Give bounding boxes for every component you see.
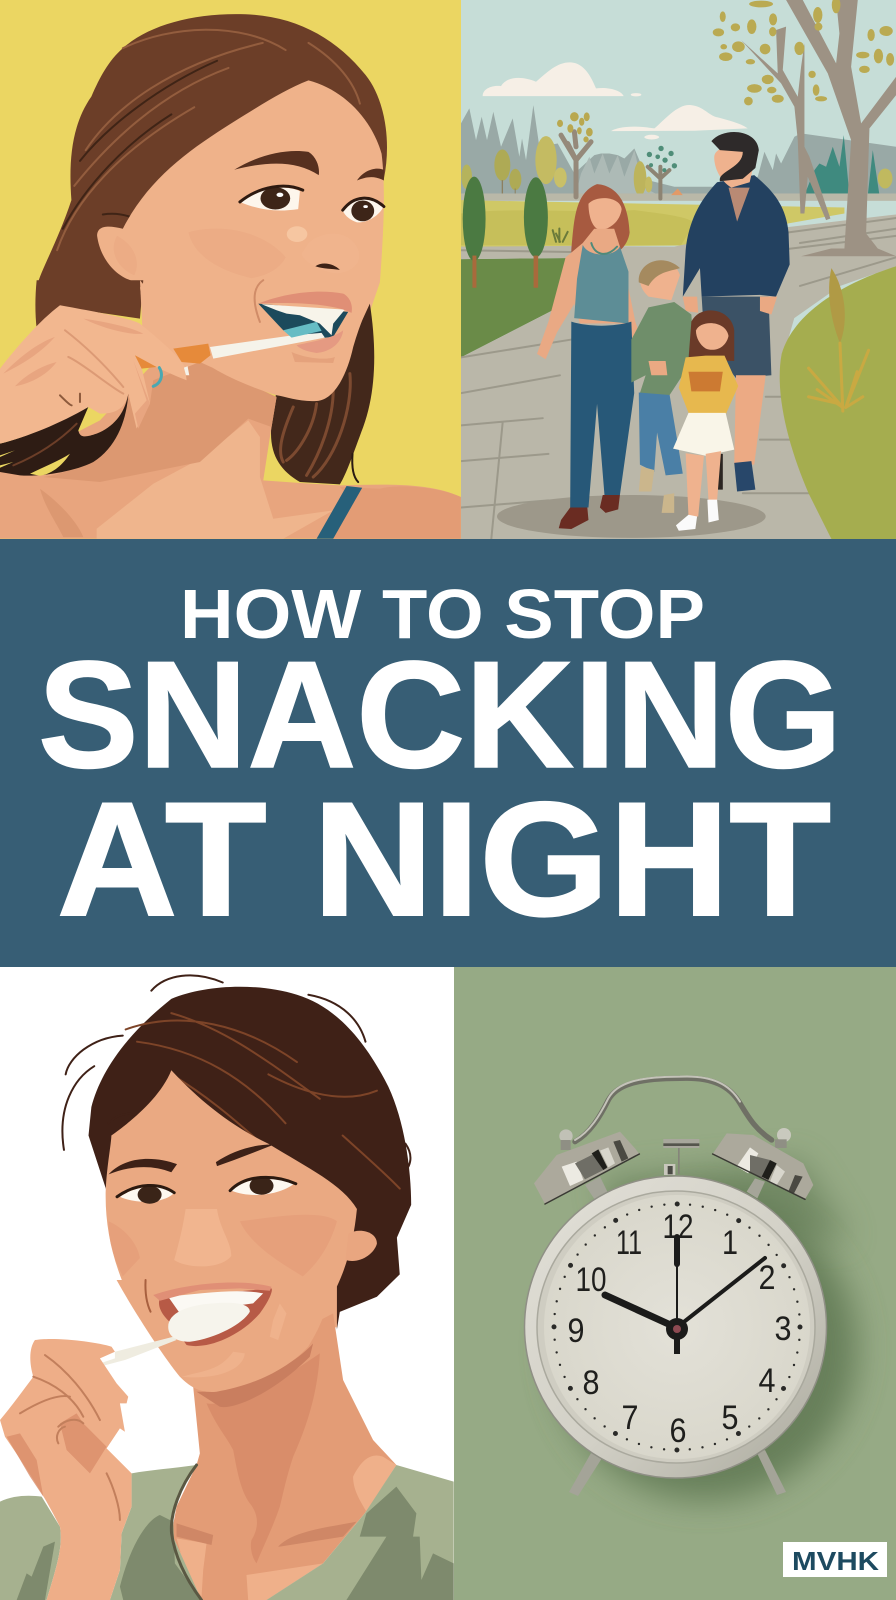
green lawn left	[461, 258, 583, 357]
chest highlight	[97, 420, 333, 539]
neck and chest	[0, 287, 461, 539]
clouds	[483, 62, 748, 139]
nose	[174, 1209, 231, 1266]
face	[106, 1070, 357, 1327]
teal trees	[804, 135, 879, 195]
neck	[172, 1313, 396, 1600]
logo badge: MVHK	[792, 1546, 879, 1576]
handle	[575, 1076, 772, 1142]
alarm pin	[663, 1139, 699, 1175]
clock numerals: 2	[758, 1259, 776, 1297]
panel: alarm clock on green	[454, 967, 896, 1600]
heading: how to stop: HOW TO STOP	[180, 575, 705, 653]
shirt folds	[17, 1487, 454, 1600]
lower portrait: hair, neck, hand, brush	[0, 280, 461, 539]
bell shadow	[600, 1160, 850, 1240]
eyebrows	[109, 1144, 274, 1174]
minute dots	[554, 1204, 800, 1450]
bells, handle and pin	[534, 1076, 813, 1204]
mouth	[153, 1283, 272, 1346]
lower right hair	[271, 304, 374, 484]
clock numerals: 9	[568, 1312, 584, 1350]
lower forest row	[574, 150, 668, 200]
clock numerals: 3	[774, 1310, 792, 1348]
hair	[62, 975, 411, 1329]
lower face	[117, 1280, 333, 1392]
large trees	[713, 0, 896, 256]
woman	[537, 184, 660, 529]
bare tree left	[557, 112, 593, 197]
heading: at night: AT NIGHT	[57, 769, 831, 950]
teal-leaf tree	[647, 146, 677, 198]
tiny playground	[671, 188, 683, 195]
heading: snacking: SNACKING	[38, 630, 842, 800]
clock numerals: 8	[582, 1364, 600, 1402]
right bell	[713, 1128, 813, 1199]
chin highlight and cheek	[182, 1303, 286, 1377]
panel: family walking in park	[461, 0, 896, 539]
main tree	[786, 0, 896, 256]
brush head and handle	[107, 322, 325, 359]
hand	[0, 1339, 132, 1600]
ear and cheek shading	[114, 229, 286, 278]
mouth	[255, 280, 352, 353]
clock numerals: 12	[662, 1208, 694, 1246]
neck light patch	[140, 280, 213, 370]
eye right	[230, 1177, 296, 1195]
lower face	[147, 280, 380, 401]
lower portrait: neck, shirt, hand, brush	[0, 1280, 454, 1600]
clock bezel	[537, 1191, 815, 1463]
eye left	[240, 186, 303, 210]
cypress trees	[463, 177, 548, 288]
yellow meadow	[461, 200, 844, 247]
clock hands	[605, 1237, 765, 1354]
round distant trees	[461, 136, 892, 199]
eyebrow	[234, 151, 384, 181]
lower left dark hair	[0, 394, 128, 476]
smile line and chin shade	[292, 352, 335, 363]
clock body	[524, 1176, 826, 1478]
leaves	[713, 0, 894, 105]
eye right	[343, 198, 384, 222]
title banner	[0, 539, 896, 967]
distant park scenery	[461, 62, 896, 247]
logo badge	[783, 1542, 887, 1577]
clock numerals: 1	[722, 1224, 738, 1262]
second tree	[741, 27, 830, 220]
orange handle	[135, 344, 211, 386]
grass tuft	[553, 229, 568, 242]
grey ground strip	[461, 193, 896, 201]
clock numerals: 7	[622, 1399, 638, 1437]
panel: smiling woman brushing on white	[0, 974, 454, 1600]
cheek shading	[109, 1215, 337, 1276]
hand	[0, 305, 187, 444]
chest fold	[40, 489, 83, 537]
mown meadow	[461, 210, 694, 245]
panel: woman brushing teeth on yellow	[0, 0, 461, 539]
upper left hair	[35, 280, 143, 329]
clock numerals: 6	[670, 1412, 686, 1450]
boy	[631, 260, 694, 513]
hair	[37, 14, 387, 286]
collarbone shade	[177, 1522, 356, 1547]
clock numerals: 5	[722, 1399, 738, 1437]
smile line	[145, 1280, 151, 1312]
forest silhouette	[461, 105, 896, 200]
eye left	[117, 1185, 174, 1204]
neck shade	[207, 1353, 320, 1563]
clock numerals	[568, 1208, 792, 1450]
nose	[287, 226, 359, 273]
ground shadow	[497, 495, 766, 538]
walkway	[461, 214, 896, 539]
man	[683, 132, 790, 491]
clock numerals: 4	[758, 1362, 776, 1400]
clock feet	[569, 1450, 786, 1496]
girl	[673, 310, 738, 531]
face	[97, 80, 384, 401]
clock numerals: 11	[616, 1224, 642, 1262]
clock numerals: 10	[576, 1261, 606, 1299]
neck highlights	[177, 1456, 396, 1600]
clock shadow	[553, 1196, 857, 1500]
walkway joints	[461, 218, 896, 539]
shirt	[0, 1465, 454, 1600]
ear	[345, 1231, 377, 1261]
neck shadow	[43, 362, 277, 482]
clock face	[544, 1195, 810, 1459]
toothbrush	[90, 1303, 250, 1368]
left bell	[534, 1129, 639, 1204]
bush	[809, 268, 869, 411]
right lawn	[780, 266, 896, 539]
top strap	[317, 486, 362, 539]
under-jaw shadow	[197, 1343, 313, 1407]
right shoulder	[333, 486, 461, 539]
